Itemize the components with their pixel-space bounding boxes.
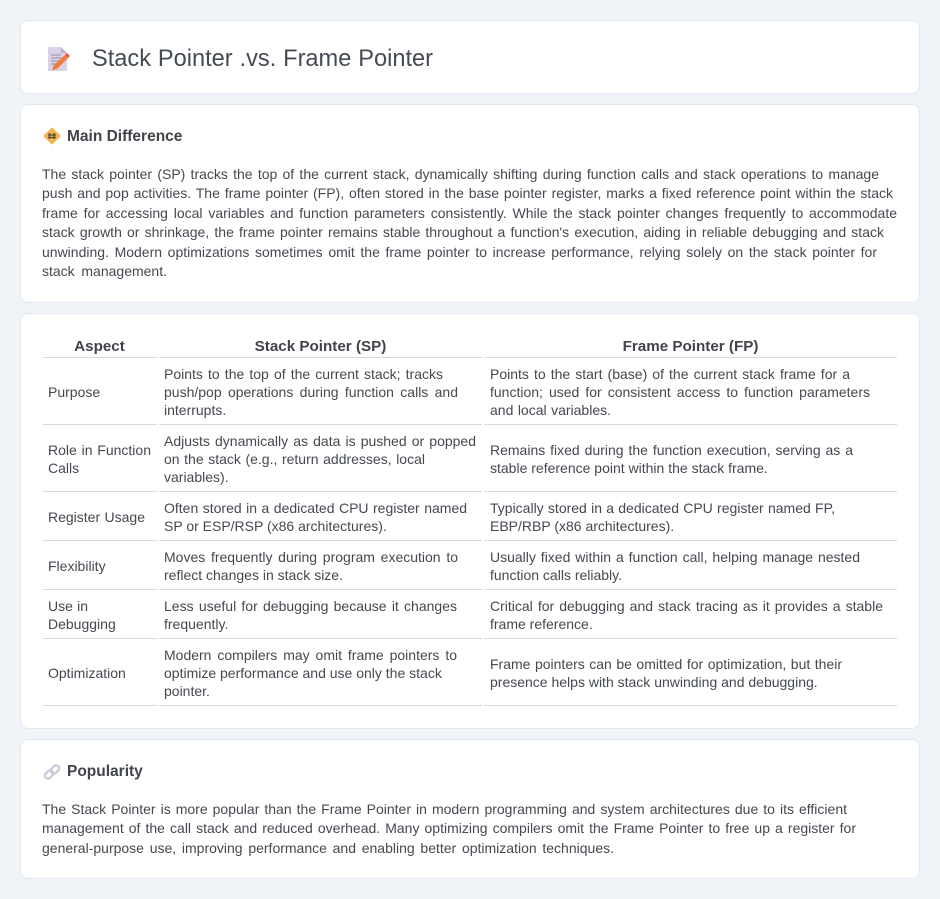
- table header: stack pointer: Stack Pointer (SP): [255, 338, 386, 355]
- row: optimization: optimize performance and use only the stack: [164, 665, 442, 681]
- row: role in function calls: Calls: [48, 460, 79, 476]
- title: Stack Pointer .vs. Frame Pointer: [92, 46, 433, 72]
- row: flexibility: function calls reliably.: [490, 567, 622, 583]
- text block: main difference: stack management.: [42, 263, 167, 279]
- panel: popularity: [20, 739, 920, 879]
- row: use in debugging: frequently.: [164, 616, 228, 632]
- row: optimization: pointer.: [164, 683, 210, 699]
- row: role in function calls: variables).: [164, 469, 229, 485]
- table header: frame pointer: Frame Pointer (FP): [623, 338, 758, 355]
- panel: title card: [20, 20, 920, 94]
- row: purpose: function; used for consistent access to function parameters: [490, 384, 870, 400]
- text block: main difference: stack growth or shrinkage, the frame pointer remains stable throughout a function's execution, aiding in reliable debugging and stack: [42, 224, 884, 240]
- row: role in function calls: Remains fixed during the function execution, serving as a: [490, 442, 853, 458]
- row: purpose: and local variables.: [490, 402, 611, 418]
- panel: comparison table: [20, 313, 920, 729]
- row: use in debugging: Less useful for debugging because it changes: [164, 598, 457, 614]
- icon: link: [44, 764, 60, 780]
- text block: main difference: push and pop activities. The frame pointer (FP), often stored in the base pointer register, marks a fixed reference point within the stack: [42, 185, 893, 201]
- row: purpose: push/pop operations during function calls and: [164, 384, 458, 400]
- heading: main difference: Main Difference: [67, 128, 182, 145]
- row: flexibility: reflect changes in stack size.: [164, 567, 343, 583]
- row: purpose: interrupts.: [164, 402, 226, 418]
- row: flexibility: Flexibility: [48, 558, 106, 574]
- row: optimization: Optimization: [48, 665, 126, 681]
- icon: orange diamond: [44, 128, 60, 144]
- row: purpose: Points to the top of the current stack; tracks: [164, 366, 443, 382]
- text block: main difference: The stack pointer (SP) tracks the top of the current stack, dynamically shifting during function calls and stack operations to manage: [42, 166, 879, 182]
- row: use in debugging: frame reference.: [490, 616, 593, 632]
- row: register usage: Often stored in a dedicated CPU register named: [164, 500, 467, 516]
- row: use in debugging: Critical for debugging and stack tracing as it provides a stable: [490, 598, 883, 614]
- text block: popularity: management of the call stack and reduced overhead. Many optimizing compilers omit the Frame Pointer to free up a register for: [42, 820, 856, 836]
- row: use in debugging: Use in: [48, 598, 88, 614]
- row: role in function calls: Adjusts dynamically as data is pushed or popped: [164, 433, 476, 449]
- text block: popularity: general-purpose use, improving performance and enabling better optimization techniques.: [42, 840, 614, 856]
- row: register usage: Typically stored in a dedicated CPU register named FP,: [490, 500, 835, 516]
- text block: main difference: unwinding. Modern optimizations sometimes omit the frame pointer to increase performance, relying solely on the stack pointer for: [42, 244, 877, 260]
- row: register usage: SP or ESP/RSP (x86 architectures).: [164, 518, 387, 534]
- row: register usage: EBP/RBP (x86 architectures).: [490, 518, 674, 534]
- row: purpose: Purpose: [48, 384, 100, 400]
- row: register usage: Register Usage: [48, 509, 145, 525]
- text block: main difference: frame for accessing local variables and function parameters consistently. While the stack pointer changes frequently to accommodate: [42, 205, 897, 221]
- row: flexibility: Moves frequently during program execution to: [164, 549, 458, 565]
- row: optimization: Modern compilers may omit frame pointers to: [164, 647, 457, 663]
- panel: main difference: [20, 104, 920, 303]
- heading: popularity: Popularity: [67, 763, 143, 780]
- row: role in function calls: Role in Function: [48, 442, 151, 458]
- icon: document with pencil: [48, 47, 70, 71]
- row: optimization: presence helps with stack unwinding and debugging.: [490, 674, 818, 690]
- row: role in function calls: stable reference point within the stack frame.: [490, 460, 768, 476]
- row: use in debugging: Debugging: [48, 616, 116, 632]
- table header: aspect: Aspect: [74, 338, 125, 355]
- row: purpose: Points to the start (base) of the current stack frame for a: [490, 366, 850, 382]
- row: role in function calls: on the stack (e.g., return addresses, local: [164, 451, 425, 467]
- row: flexibility: Usually fixed within a function call, helping manage nested: [490, 549, 860, 565]
- text block: popularity: The Stack Pointer is more popular than the Frame Pointer in modern programming and system architectures due to its efficient: [42, 801, 847, 817]
- row: optimization: Frame pointers can be omitted for optimization, but their: [490, 656, 842, 672]
